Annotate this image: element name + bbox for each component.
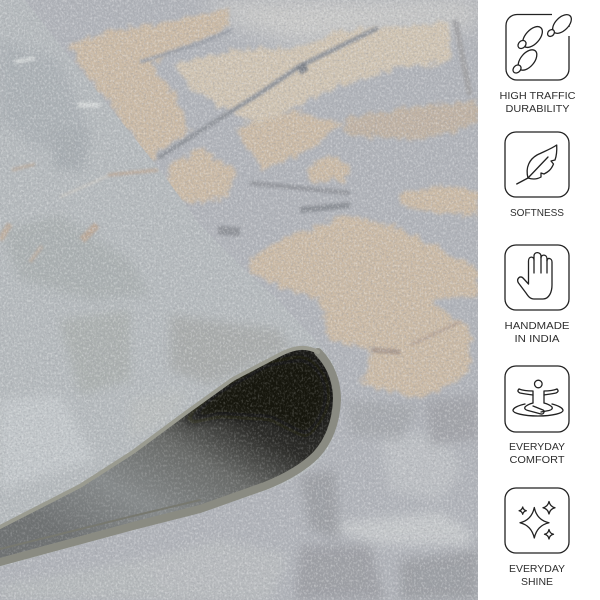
rolled rug underside xyxy=(0,350,333,558)
label: everyday comfort: COMFORT xyxy=(510,455,564,466)
icon: feather xyxy=(505,132,569,197)
rug floor base xyxy=(0,0,478,600)
label: high traffic durability xyxy=(500,91,576,115)
dark diagonal lines on rug xyxy=(140,20,470,352)
feature: handmade in india xyxy=(504,245,570,345)
feature: softness xyxy=(505,132,569,219)
label: high traffic durability: DURABILITY xyxy=(506,104,570,115)
rolled rug top surface xyxy=(0,56,312,493)
icon: meditating person xyxy=(505,366,569,432)
carpet pile texture xyxy=(0,0,478,600)
icon panel xyxy=(500,11,576,588)
label: handmade in india: IN INDIA xyxy=(514,334,560,345)
floor light and dark patches xyxy=(295,396,478,600)
label: softness: SOFTNESS xyxy=(510,208,564,219)
label: handmade in india: HANDMADE xyxy=(504,321,570,332)
beige pattern patches xyxy=(68,8,478,398)
label: high traffic durability: HIGH TRAFFIC xyxy=(500,91,576,102)
icon: footprints xyxy=(506,11,575,80)
icon: sparkles xyxy=(505,488,569,553)
rug photograph xyxy=(0,0,478,600)
light top area xyxy=(200,0,478,45)
icon: hand xyxy=(505,245,569,310)
label: everyday comfort xyxy=(509,442,565,466)
label: everyday shine: EVERYDAY xyxy=(509,564,565,575)
label: everyday shine xyxy=(509,564,565,588)
rug rim binding xyxy=(0,348,337,562)
label: handmade in india xyxy=(504,321,570,345)
label: everyday comfort: EVERYDAY xyxy=(509,442,565,453)
feature: everyday shine xyxy=(505,488,569,588)
label: everyday shine: SHINE xyxy=(521,577,553,588)
feature: high traffic durability xyxy=(500,11,576,115)
carpet pile highlights xyxy=(0,0,478,600)
feature: everyday comfort xyxy=(505,366,569,466)
